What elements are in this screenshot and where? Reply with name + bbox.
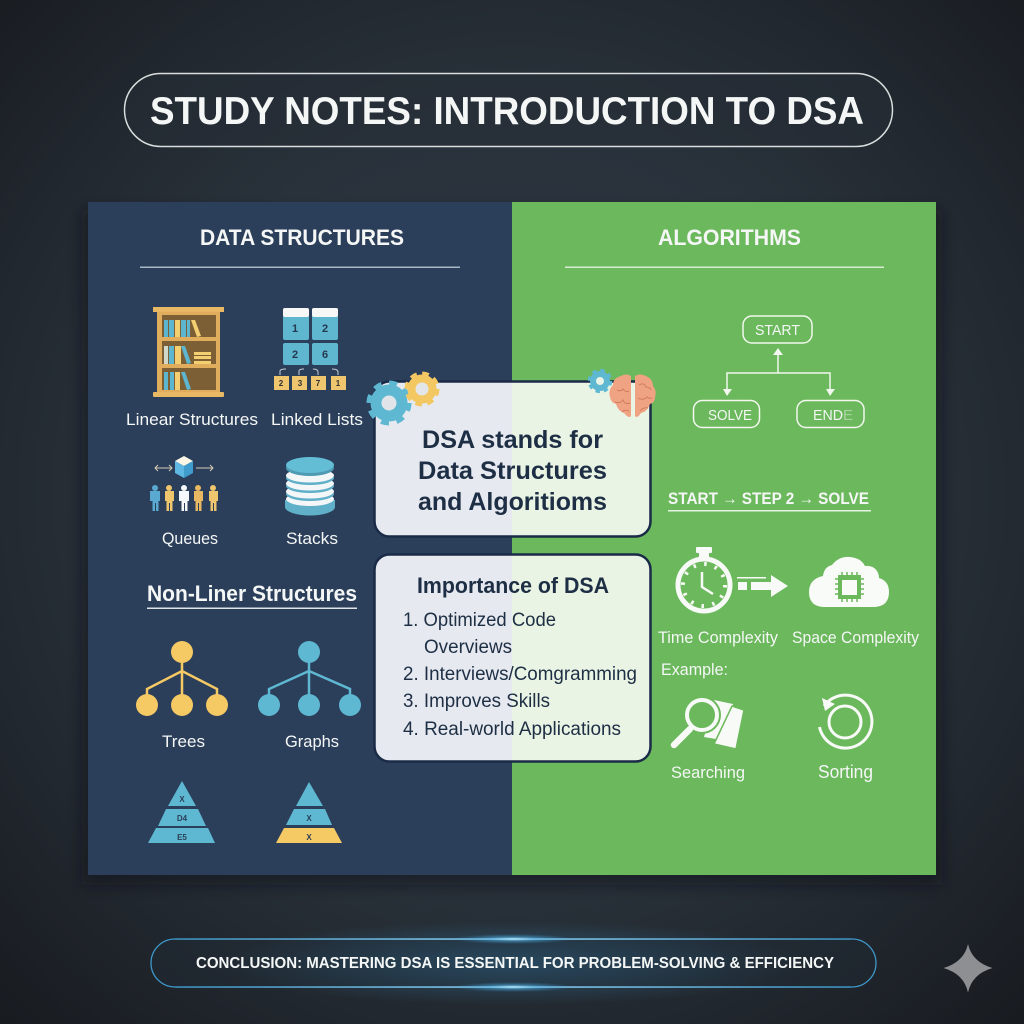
importance list: Overviews — [424, 637, 512, 658]
flowchart: SOLVE — [708, 407, 752, 424]
importance heading: Importance of DSA — [417, 573, 609, 598]
heading: non-linear structures: Non-Liner Structures — [147, 581, 357, 606]
label: space complexity: Space Complexity — [792, 628, 919, 647]
icon: sorting — [820, 695, 872, 748]
icon: bookshelf — [153, 307, 224, 397]
card: dsa definition — [374, 382, 650, 536]
icon: linked lists: 6 — [322, 349, 328, 361]
icon: yellow gear — [407, 374, 437, 404]
icon: graph — [258, 641, 361, 716]
icon: linked lists: 3 — [298, 379, 303, 388]
icon: stacks — [285, 457, 335, 516]
importance list: 4. Real-world Applications — [403, 719, 621, 740]
icon: linked lists: 2 — [322, 323, 328, 335]
icon: searching — [674, 696, 744, 749]
label: sorting: Sorting — [818, 762, 873, 782]
title — [124, 74, 892, 146]
conclusion banner — [151, 921, 876, 1005]
icon: linked lists — [274, 308, 346, 390]
icon: pyramid blue: E5 — [177, 833, 187, 842]
icon: queues — [150, 456, 218, 511]
definition text: DSA stands for — [422, 426, 603, 454]
flow sequence: START → STEP 2 → SOLVE — [668, 489, 869, 508]
importance list: 2. Interviews/Comgramming — [403, 664, 637, 685]
definition text: Data Structures — [418, 457, 607, 485]
panel: algorithms — [512, 202, 936, 875]
heading: data structures: DATA STRUCTURES — [200, 225, 404, 250]
label: example: Example: — [661, 660, 728, 679]
importance list: 1. Optimized Code — [403, 610, 556, 631]
icon: pyramid yellow: X — [306, 833, 312, 842]
panel: data structures — [88, 202, 512, 875]
icon: teal gear — [369, 383, 409, 423]
icon: linked lists: 2 — [279, 379, 284, 388]
card: importance of dsa — [374, 554, 650, 762]
flowchart: E — [843, 407, 853, 424]
heading: algorithms: ALGORITHMS — [658, 225, 801, 250]
label: stacks: Stacks — [286, 529, 338, 548]
icon: pyramid blue: X — [179, 795, 185, 804]
label: queues: Queues — [162, 529, 218, 548]
label: time complexity: Time Complexity — [658, 628, 778, 647]
flowchart: END — [813, 407, 843, 424]
icon: tree — [136, 641, 228, 716]
conclusion banner: CONCLUSION: MASTERING DSA IS ESSENTIAL FOR PROBLEM-SOLVING & EFFICIENCY — [196, 955, 835, 972]
icon: pyramid yellow — [276, 782, 342, 843]
importance list — [403, 610, 637, 740]
label: searching: Searching — [671, 763, 745, 782]
icon: cloud chip — [809, 557, 889, 607]
icon: linked lists: 1 — [336, 379, 341, 388]
definition text — [418, 426, 607, 516]
icon: pyramid yellow: X — [306, 814, 312, 823]
icon: linked lists: 2 — [292, 349, 298, 361]
definition text: and Algoritioms — [418, 488, 607, 516]
icon: pyramid blue — [148, 781, 215, 843]
icon: linked lists: 7 — [316, 379, 321, 388]
icon: small teal gear — [590, 370, 610, 392]
label: trees: Trees — [162, 732, 205, 751]
icon: stopwatch — [678, 547, 730, 611]
flowchart — [694, 316, 864, 428]
importance list: 3. Improves Skills — [403, 691, 550, 712]
icon: pyramid blue: D4 — [177, 814, 188, 823]
label: linked lists: Linked Lists — [271, 410, 363, 429]
icon: brain — [609, 374, 656, 417]
label: linear structures: Linear Structures — [126, 410, 258, 429]
title: STUDY NOTES: INTRODUCTION TO DSA — [150, 90, 864, 133]
label: graphs: Graphs — [285, 732, 339, 751]
icon: sparkle — [944, 944, 992, 992]
icon: linked lists: 1 — [292, 323, 298, 335]
flowchart: START — [755, 322, 800, 339]
icon: arrow right — [737, 575, 788, 597]
